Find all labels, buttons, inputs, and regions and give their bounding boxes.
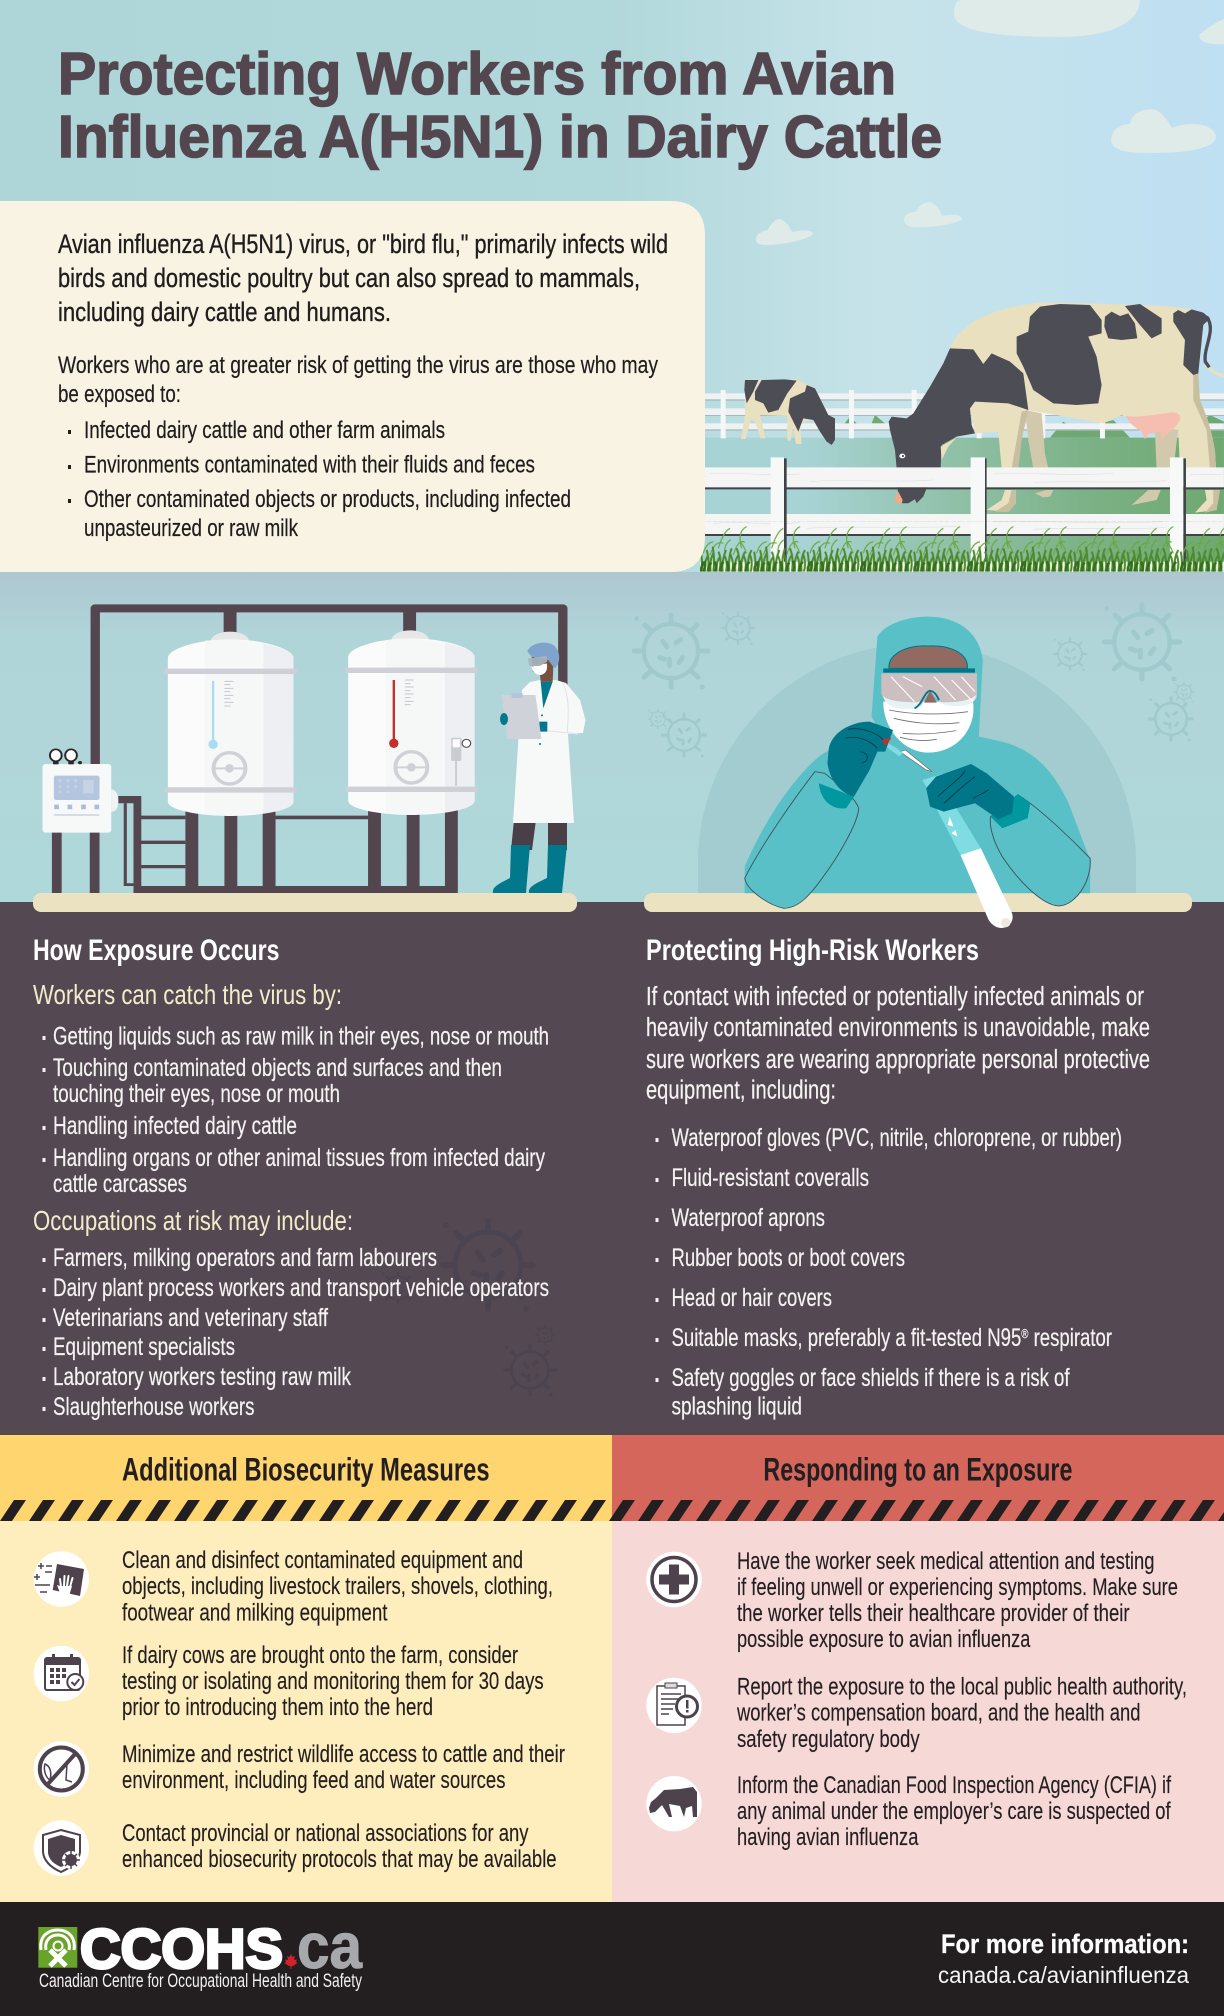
text: clean and disinfect — [122, 1547, 553, 1626]
back fence — [700, 390, 1224, 438]
title: Protecting Workers from Avian — [58, 41, 896, 107]
list: protective equipment: Waterproof aprons — [672, 1204, 825, 1232]
list: occupations at risk: Slaughterhouse workers — [53, 1393, 254, 1421]
tail — [1207, 366, 1224, 376]
dropper — [900, 750, 932, 772]
exposure list: unpasteurized or raw milk — [84, 515, 299, 542]
exposure list — [68, 417, 571, 542]
title: Influenza A(H5N1) in Dairy Cattle — [58, 104, 942, 170]
logo: CCOHS.ca — [38, 1910, 362, 1992]
icon: calendar — [34, 1646, 89, 1701]
text: inform CFIA — [737, 1772, 1171, 1851]
front fence — [700, 457, 1224, 567]
text: contact associations: Contact provincial or national associations for any — [122, 1820, 529, 1847]
list: protective equipment: Suitable masks, preferably a fit-tested N95 — [672, 1324, 1143, 1352]
udder — [1126, 412, 1180, 439]
list: occupations at risk: Dairy plant process workers and transport vehicle operators — [53, 1274, 549, 1302]
right sleeve — [990, 796, 1090, 906]
list: protective equipment: respirator — [1028, 1324, 1112, 1352]
shelf: right — [644, 893, 1192, 912]
background virus icons — [634, 605, 1194, 758]
title — [58, 41, 942, 170]
text: restrict wildlife: Minimize and restrict wildlife access to cattle and their — [122, 1741, 565, 1768]
paragraph: equipment, including: — [646, 1076, 836, 1104]
text: contact associations: enhanced biosecurity protocols that may be available — [122, 1846, 557, 1873]
text: monitor new cows: If dairy cows are brought onto the farm, consider — [122, 1642, 518, 1669]
list: occupations at risk: Veterinarians and veterinary staff — [53, 1304, 328, 1332]
test tube — [922, 774, 981, 855]
list: protective equipment: Rubber boots or boot covers — [672, 1244, 905, 1272]
list: occupations at risk — [42, 1244, 549, 1421]
logo mark — [38, 1927, 77, 1968]
tank 1 — [165, 639, 297, 816]
exposure list: Infected dairy cattle and other farm animals — [84, 417, 445, 444]
pipe frame — [95, 608, 563, 773]
risk statement: be exposed to: — [58, 381, 181, 408]
icon: cow — [646, 1776, 702, 1831]
list: occupations at risk: Farmers, milking operators and farm labourers — [53, 1244, 437, 1272]
footer — [0, 1902, 1224, 2016]
list: how workers catch the virus: Handling organs or other animal tissues from infected dairy — [53, 1144, 545, 1172]
exposure list: Environments contaminated with their fluids and feces — [84, 452, 535, 478]
intro paragraph: including dairy cattle and humans. — [58, 297, 391, 327]
left sleeve — [745, 772, 859, 908]
cuffs — [819, 783, 1030, 828]
goggles — [881, 673, 977, 708]
list: how workers catch the virus: Getting liquids such as raw milk in their eyes, nose or mouth — [53, 1022, 549, 1050]
list: occupations at risk: Laboratory workers testing raw milk — [53, 1363, 351, 1391]
coat — [513, 680, 586, 823]
icon: cleaning hand — [34, 1551, 89, 1607]
exposure list: Other contaminated objects or products, including infected — [84, 486, 571, 513]
list: protective equipment — [656, 1124, 1122, 1420]
list: how workers catch the virus: Touching contaminated objects and surfaces and then — [53, 1054, 502, 1082]
shelf: left — [33, 893, 577, 912]
text: contact associations — [122, 1820, 557, 1873]
list: how workers catch the virus — [42, 1022, 549, 1198]
more information: canada.ca/avianinfluenza — [938, 1962, 1189, 1988]
list: how workers catch the virus: cattle carcasses — [53, 1170, 187, 1198]
panel: how exposure occurs — [33, 934, 549, 1421]
big cow — [889, 302, 1224, 513]
risk statement — [58, 352, 658, 408]
gloves — [827, 722, 893, 797]
tank 2 — [345, 638, 478, 815]
list: protective equipment: Head or hair covers — [672, 1284, 832, 1312]
text: inform CFIA: having avian influenza — [737, 1824, 919, 1851]
icon: clipboard alert — [646, 1678, 702, 1733]
background bushes — [843, 415, 1224, 438]
far legs — [1025, 410, 1178, 505]
panel: additional biosecurity measures — [0, 1435, 612, 1902]
background virus marks in dark panel — [382, 1221, 555, 1396]
icon: shield with virus — [34, 1820, 89, 1876]
text: seek medical attention — [737, 1548, 1178, 1653]
text: monitor new cows — [122, 1642, 544, 1721]
panel: protecting high-risk workers — [646, 934, 1150, 1420]
subheading: occupations: Occupations at risk may include: — [33, 1205, 353, 1236]
maple leaf — [284, 1954, 298, 1969]
text: monitor new cows: prior to introducing them into the herd — [122, 1694, 433, 1721]
ground — [700, 438, 1224, 572]
control panel — [43, 749, 118, 894]
small cow — [741, 379, 835, 445]
icon: medical cross — [646, 1552, 702, 1607]
intro paragraph: Avian influenza A(H5N1) virus, or "bird flu," primarily infects wild — [58, 229, 668, 259]
illustration: lab coat worker — [493, 643, 586, 893]
dark patches — [889, 348, 1028, 468]
text: restrict wildlife: environment, including feed and water sources — [122, 1767, 506, 1794]
text: report exposure — [736, 1674, 1187, 1753]
logo tagline: Canadian Centre for Occupational Health and Safety — [39, 1971, 362, 1992]
icon: no wildlife — [34, 1741, 89, 1797]
scrub top — [539, 682, 553, 732]
eye — [899, 454, 905, 458]
tank legs and pipes — [118, 796, 458, 894]
illustration: suited worker with test tube — [745, 617, 1090, 928]
illustration: milk tanks and worker — [43, 607, 563, 894]
list: occupations at risk: Equipment specialists — [53, 1333, 235, 1361]
text: clean and disinfect: objects, including livestock trailers, shovels, clothing, — [122, 1573, 553, 1600]
legs and boots — [511, 820, 567, 850]
more information: For more information: — [941, 1929, 1189, 1959]
panel: introduction — [0, 201, 705, 572]
hazard stripes — [0, 1500, 1224, 1521]
list: protective equipment: Fluid-resistant coveralls — [672, 1164, 869, 1192]
suit — [745, 617, 1090, 893]
list: how workers catch the virus: touching their eyes, nose or mouth — [53, 1080, 340, 1108]
text: restrict wildlife — [122, 1741, 565, 1794]
heading: Responding to an Exposure — [763, 1452, 1072, 1488]
tank knobs — [211, 630, 429, 642]
heading: How Exposure Occurs — [33, 934, 280, 967]
subheading: workers can catch: Workers can catch the virus by: — [33, 979, 342, 1010]
illustration: pasture scene with cows and fence — [700, 302, 1224, 572]
paragraph — [646, 983, 1150, 1104]
dark section background — [0, 902, 1224, 1435]
snout — [897, 487, 927, 503]
head — [527, 643, 578, 745]
mask — [883, 702, 973, 753]
logo wordmark: CCOHS — [80, 1917, 283, 1980]
text: monitor new cows: testing or isolating and monitoring them for 30 days — [122, 1668, 544, 1695]
text: report exposure: safety regulatory body — [737, 1726, 920, 1753]
background circle behind suited worker — [698, 644, 1136, 893]
body — [950, 302, 1216, 468]
grass — [700, 522, 1224, 572]
blood tip — [881, 738, 891, 746]
panel: responding to an exposure — [612, 1435, 1224, 1902]
clipboard — [502, 695, 541, 739]
face — [889, 646, 967, 668]
heading: Additional Biosecurity Measures — [122, 1452, 490, 1488]
more information — [938, 1929, 1189, 1988]
intro paragraph — [58, 229, 668, 327]
intro paragraph: birds and domestic poultry but can also spread to mammals, — [58, 263, 640, 293]
text: seek medical attention: possible exposure to avian influenza — [737, 1626, 1031, 1653]
clouds — [756, 0, 1224, 245]
text: clean and disinfect: Clean and disinfect contaminated equipment and — [122, 1547, 523, 1574]
list: protective equipment: splashing liquid — [672, 1392, 802, 1420]
illustration background band — [0, 572, 1224, 903]
logo domain: ca — [297, 1910, 362, 1982]
list: protective equipment: ® — [1021, 1326, 1029, 1341]
text: clean and disinfect: footwear and milking equipment — [122, 1600, 388, 1626]
list: protective equipment: Safety goggles or face shields if there is a risk of — [672, 1364, 1070, 1392]
risk statement: Workers who are at greater risk of getting the virus are those who may — [58, 352, 658, 379]
list: how workers catch the virus: Handling infected dairy cattle — [53, 1112, 297, 1140]
heading: Protecting High-Risk Workers — [646, 934, 979, 967]
sky background — [0, 0, 1224, 575]
